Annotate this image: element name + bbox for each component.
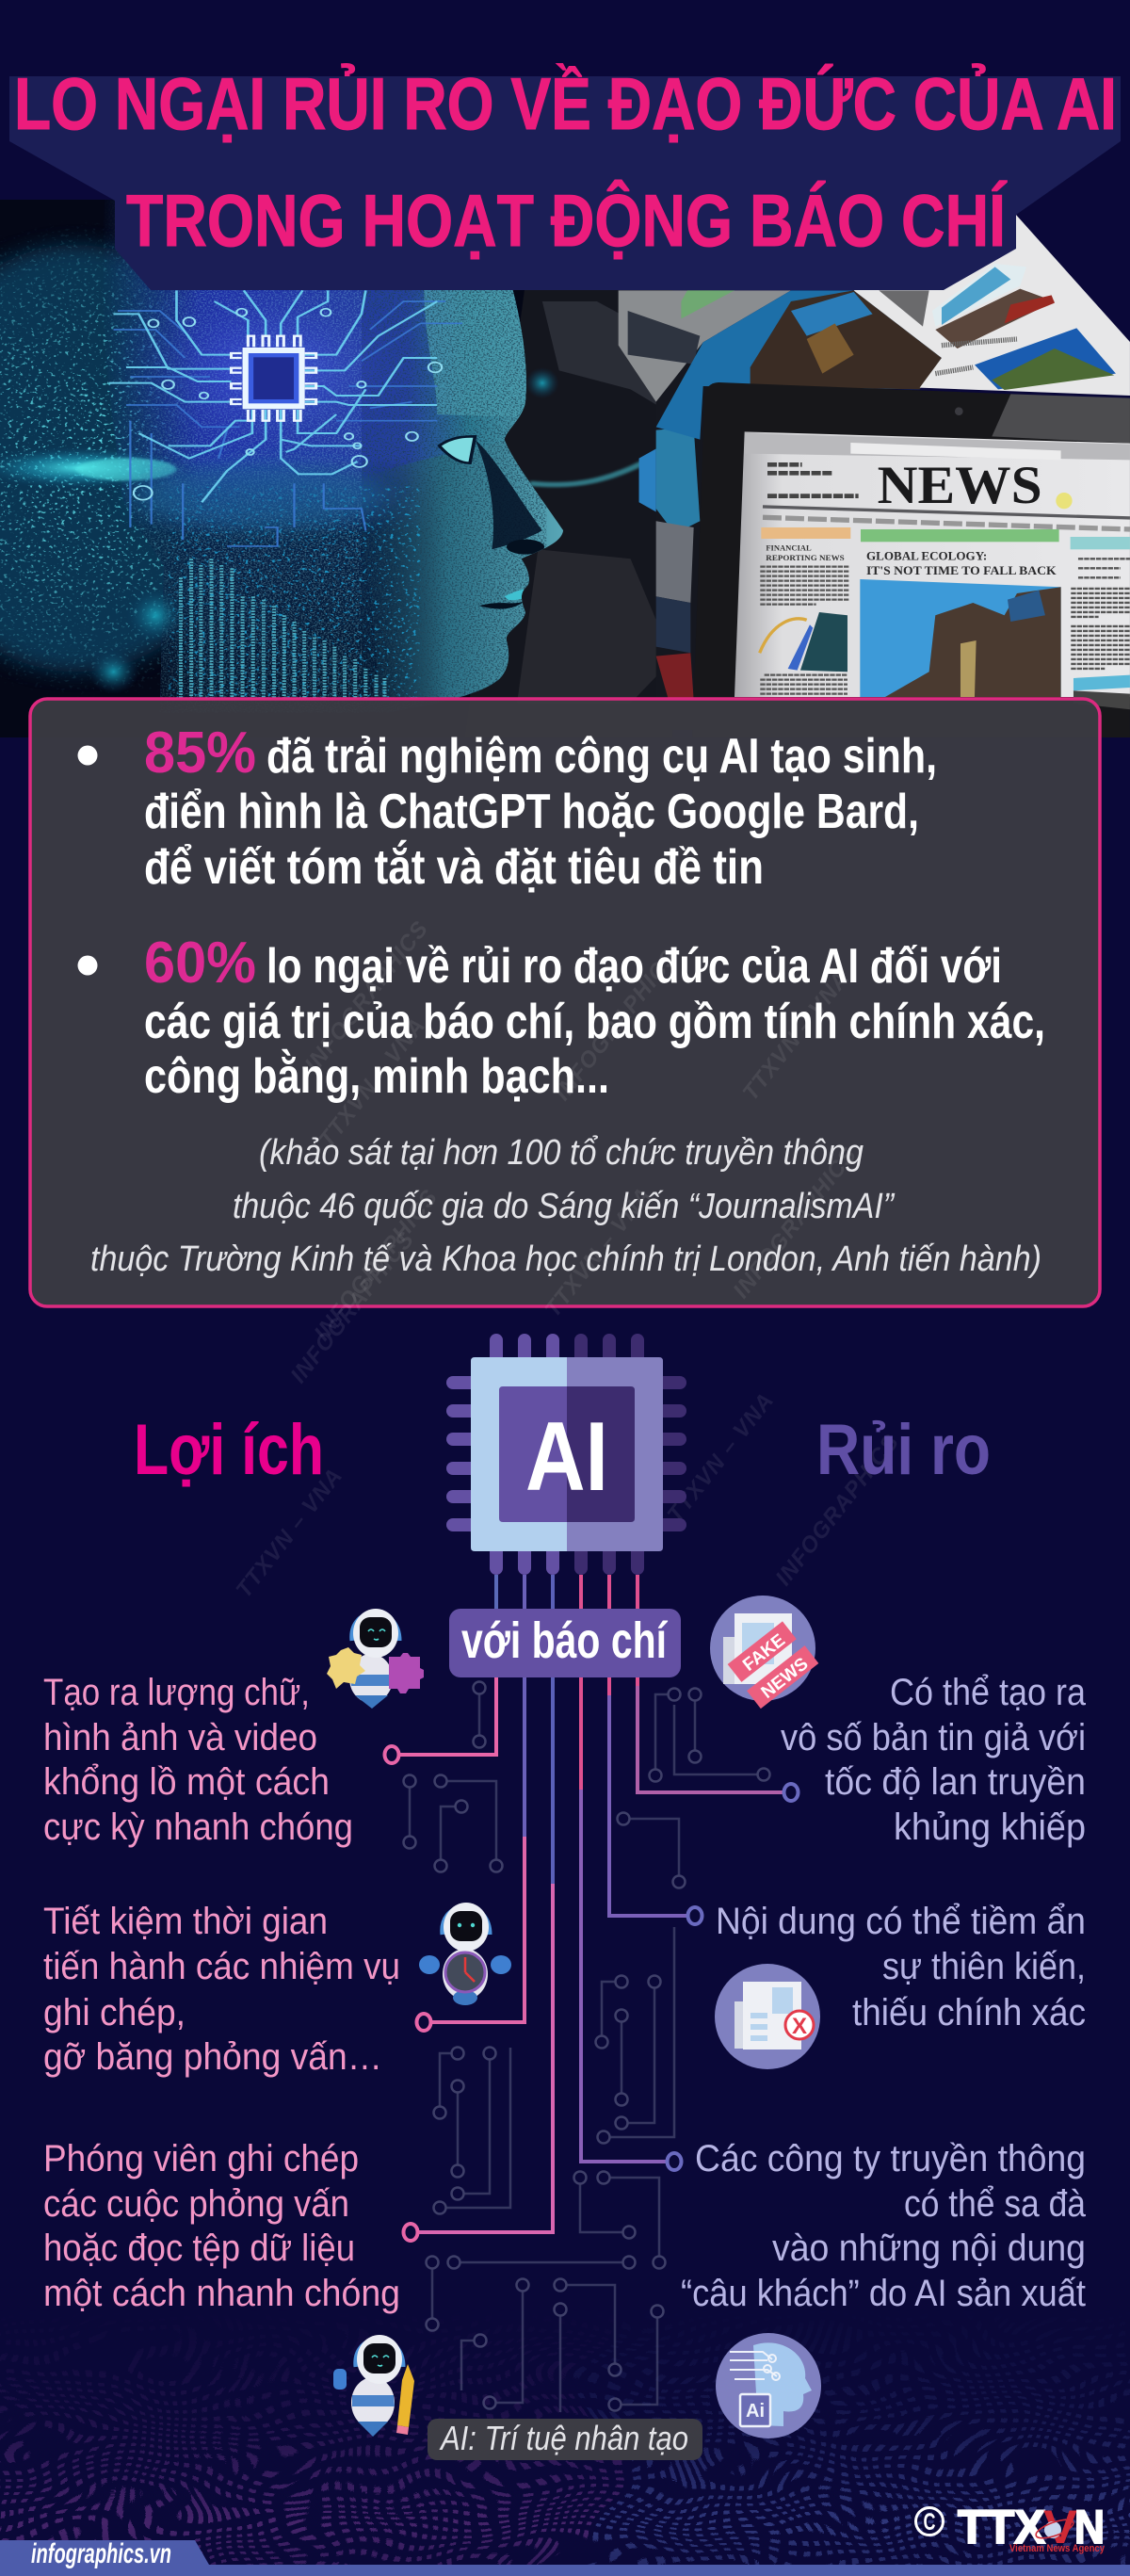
icon: robot with puzzle pieces: [327, 1609, 424, 1709]
white paper: [854, 215, 1130, 396]
TTXVN logo: N: [1074, 2501, 1105, 2553]
bullet 60 percent: 60%: [144, 931, 256, 996]
decorative circuit traces: [403, 1682, 770, 2412]
risk text 2: thiếu chính xác: [852, 1992, 1086, 2033]
benefit text 3: một cách nhanh chóng: [43, 2273, 400, 2314]
benefit text 2: [43, 1901, 400, 2078]
connector: benefit 3: [418, 1575, 553, 2232]
watermarks: INFOGRAPHICS: [549, 945, 683, 1106]
watermarks: TTXVN – VNA: [662, 1387, 780, 1528]
risk text 1: tốc độ lan truyền: [825, 1761, 1086, 1803]
icon: robot with pencil: [333, 2335, 414, 2437]
risk text 2: [716, 1901, 1086, 2033]
particle field: [0, 226, 190, 691]
label: với báo chí: [449, 1609, 681, 1677]
connector: risk 2: [609, 1575, 687, 1916]
benefit text 1: cực kỳ nhanh chóng: [43, 1806, 353, 1848]
watermarks: TTXVN – VNA: [540, 1182, 657, 1322]
hero right: newspapers and tablet: IT'S NOT TIME TO FALL BACK: [866, 564, 1057, 577]
bullet 85 percent: [77, 721, 937, 895]
connector traces: [399, 1575, 783, 2232]
wave dots: purple side: [0, 2358, 624, 2565]
icon: biased content document: [715, 1964, 820, 2069]
bullet 85 percent: 85%: [144, 721, 256, 786]
TTXVN logo: V: [1043, 2501, 1078, 2553]
benefit text 3: hoặc đọc tệp dữ liệu: [43, 2228, 355, 2269]
risk text 3: vào những nội dung: [772, 2228, 1086, 2269]
watermarks: INFOGRAPHICS: [728, 1142, 862, 1304]
icon: fake news: NEWS: [758, 1654, 812, 1703]
watermarks: INFOGRAPHICS: [285, 1227, 419, 1388]
icon: fake news: [710, 1596, 819, 1709]
title banner: [9, 76, 1121, 290]
tablet body: [692, 382, 1130, 741]
newspaper headline: NEWS: [878, 456, 1042, 515]
connector: benefit 1: [399, 1575, 496, 1755]
survey source note: [90, 1133, 1041, 1279]
hero image: AI head and newspapers: [0, 188, 1130, 756]
benefit text 1: Tạo ra lượng chữ,: [43, 1672, 310, 1713]
dim tablet: [655, 343, 708, 697]
benefit text 2: gỡ băng phỏng vấn…: [43, 2036, 382, 2078]
AI chip: AI: [525, 1402, 608, 1512]
bullet 60 percent: [77, 931, 1045, 1104]
icon: AI head with chip: [716, 2333, 821, 2438]
risk text 1: Có thể tạo ra: [890, 1672, 1087, 1713]
connector top tints: [496, 1575, 638, 1884]
hero right: newspapers and tablet: FINANCIAL: [766, 543, 812, 552]
bullet 60 percent: công bằng, minh bạch...: [144, 1048, 609, 1104]
benefit text 3: Phóng viên ghi chép: [43, 2138, 359, 2179]
watermarks: INFOGRAPHICS: [464, 1387, 598, 1548]
risk text 3: [681, 2138, 1087, 2314]
risk text 1: khủng khiếp: [894, 1806, 1086, 1848]
eye: [439, 436, 475, 463]
hero left: AI head: [0, 188, 672, 756]
AI definition note: AI: Trí tuệ nhân tạo: [439, 2419, 688, 2457]
risk text 3: “câu khách” do AI sản xuất: [681, 2273, 1086, 2314]
connector: risk 1: [638, 1575, 783, 1792]
connector end rings: [384, 1746, 799, 2241]
watermarks: TTXVN – VNA: [231, 1463, 348, 1603]
blue page: [656, 290, 942, 440]
label: với báo chí: với báo chí: [461, 1612, 669, 1669]
risk text 3: Các công ty truyền thông: [695, 2138, 1086, 2179]
icon: fake news: FAKE: [739, 1630, 789, 1676]
risk text 3: có thể sa đà: [904, 2183, 1087, 2225]
hero right: newspapers and tablet: REPORTING NEWS: [766, 553, 845, 562]
benefit text 2: tiến hành các nhiệm vụ: [43, 1946, 400, 1987]
watermarks: TTXVN – VNA: [314, 1013, 431, 1153]
circuit traces: [114, 301, 462, 546]
icon: AI head with chip: Ai: [746, 2401, 765, 2422]
benefit text 1: [43, 1672, 353, 1848]
bottom bar: [0, 2565, 1130, 2576]
heading: risks: Rủi ro: [816, 1410, 991, 1490]
watermarks: INFOGRAPHICS: [770, 1430, 904, 1591]
TTXVN logo: [915, 2501, 1106, 2554]
bullet 85 percent: điển hình là ChatGPT hoặc Google Bard,: [144, 785, 919, 839]
building photo: [860, 579, 1061, 697]
head shape: [107, 200, 563, 697]
TTXVN logo: C: [923, 2509, 936, 2535]
icon: biased content document: X: [792, 2014, 807, 2039]
survey source note: thuộc 46 quốc gia do Sáng kiến “JournalismAI”: [233, 1187, 896, 1226]
page photo: [751, 290, 942, 389]
benefit text 1: hình ảnh và video: [43, 1717, 317, 1758]
code columns: [181, 559, 384, 700]
wave dots: blue side: [573, 2354, 1130, 2565]
risk text 1: [781, 1672, 1087, 1848]
bullet 85 percent: đã trải nghiệm công cụ AI tạo sinh,: [266, 729, 937, 784]
benefit text 1: khổng lồ một cách: [43, 1761, 330, 1803]
hero right: newspapers and tablet: [619, 198, 1130, 741]
AI chip: [446, 1334, 686, 1575]
risk text 2: Nội dung có thể tiềm ẩn: [716, 1901, 1086, 1942]
icon: robot with clock: [419, 1903, 511, 2005]
TTXVN logo: Vietnam News Agency: [1009, 2543, 1106, 2554]
bullet 85 percent: để viết tóm tắt và đặt tiêu đề tin: [144, 839, 764, 895]
benefit text 3: [43, 2138, 400, 2314]
chip: [232, 336, 316, 421]
watermarks: INFOGRAPHICS: [299, 916, 433, 1077]
data stream: [0, 446, 158, 488]
watermarks: TTXVN – VNA: [737, 965, 855, 1106]
benefit text 2: Tiết kiệm thời gian: [43, 1901, 328, 1942]
TTXVN logo: TTX: [958, 2501, 1045, 2553]
watermarks: INFOGRAPHICS: [309, 1185, 443, 1346]
connector: benefit 2: [431, 1575, 525, 2022]
gray newspaper: [619, 290, 791, 402]
benefit text 3: các cuộc phỏng vấn: [43, 2183, 349, 2225]
heading: benefits: Lợi ích: [134, 1410, 324, 1490]
risk text 2: sự thiên kiến,: [882, 1946, 1086, 1987]
watermarks: [231, 916, 904, 1603]
risk text 1: vô số bản tin giả với: [781, 1717, 1086, 1758]
site label: infographics.vn: [31, 2538, 171, 2569]
calculator photo: [800, 612, 848, 672]
title: [14, 62, 1117, 262]
hero right: newspapers and tablet: GLOBAL ECOLOGY:: [866, 550, 987, 563]
tablet screen: [734, 431, 1130, 697]
benefit text 2: ghi chép,: [43, 1992, 186, 2033]
panel: survey findings: [30, 699, 1100, 1306]
connector: risk 3: [581, 1575, 667, 2162]
survey source note: (khảo sát tại hơn 100 tổ chức truyền thông: [259, 1133, 864, 1173]
survey source note: thuộc Trường Kinh tế và Khoa học chính trị London, Anh tiến hành): [90, 1239, 1041, 1279]
